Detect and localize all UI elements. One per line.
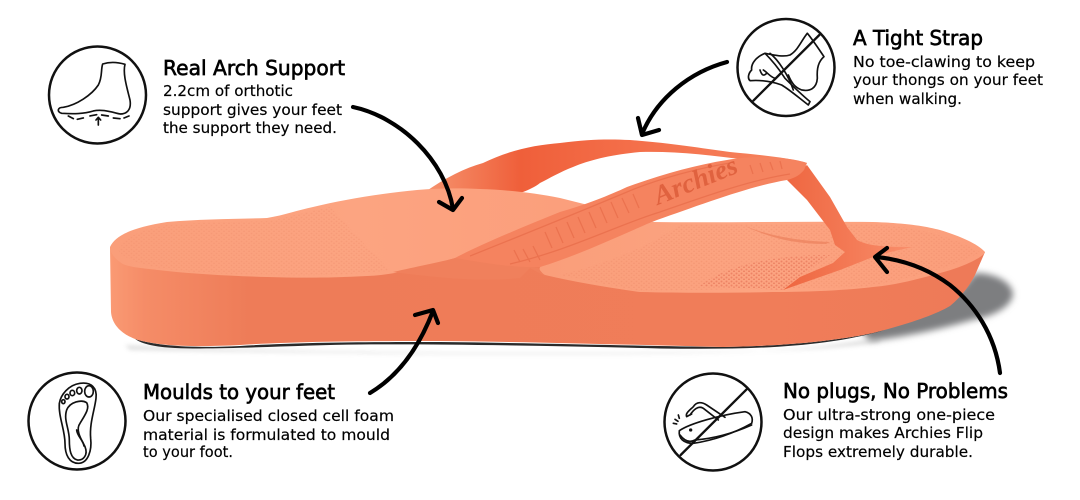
heading: Real Arch Support [163, 56, 345, 80]
arrow: tight strap [638, 62, 727, 135]
callout: no plugs, no problems [664, 374, 1008, 470]
heading: Moulds to your feet [143, 380, 335, 404]
body text [163, 82, 342, 137]
icon: footprint [28, 372, 126, 470]
callout: real arch support [49, 46, 345, 144]
heel texture [118, 207, 390, 275]
body text [143, 407, 394, 461]
toe post [783, 165, 913, 290]
body text: design makes Archies Flip [783, 424, 983, 442]
forefoot texture [560, 224, 980, 291]
body text: No toe-clawing to keep [853, 53, 1035, 71]
body text: your thongs on your feet [853, 71, 1043, 89]
sole side wall [110, 240, 985, 347]
body text: support gives your feet [163, 101, 342, 119]
strap embossed pattern [470, 161, 790, 264]
heading: A Tight Strap [853, 26, 983, 50]
body text: Our specialised closed cell foam [143, 407, 394, 425]
heading: No plugs, No Problems [783, 379, 1008, 403]
arrow: arch support [353, 107, 462, 210]
body text: the support they need. [163, 119, 337, 137]
icon: foot in thong crossed out [738, 19, 834, 116]
far strap [425, 139, 807, 200]
forefoot deep texture [700, 255, 830, 290]
flip flop photo illustration [110, 139, 1013, 354]
body text [853, 53, 1043, 108]
body text: to your foot. [143, 443, 233, 461]
heel and arch footbed [110, 188, 600, 278]
body text [783, 406, 995, 461]
forefoot footbed [540, 222, 985, 293]
toe crease [745, 226, 830, 244]
lower flange of strap [393, 258, 545, 280]
body text: 2.2cm of orthotic [163, 82, 293, 100]
ground shadow [125, 273, 1013, 354]
body text: Our ultra-strong one-piece [783, 406, 995, 424]
arrow: no plugs [875, 248, 1000, 373]
body text: material is formulated to mould [143, 426, 390, 444]
icon: foot with arch [49, 46, 146, 144]
icon: flip flop crossed out [664, 374, 762, 470]
callout: a tight strap [738, 19, 1043, 116]
body text: when walking. [853, 90, 962, 108]
near strap [455, 157, 807, 267]
body text: Flops extremely durable. [783, 443, 973, 461]
callout: moulds to your feet [28, 372, 394, 470]
arrow: moulds to your feet [370, 310, 438, 393]
strap logo: Archies [647, 150, 742, 211]
